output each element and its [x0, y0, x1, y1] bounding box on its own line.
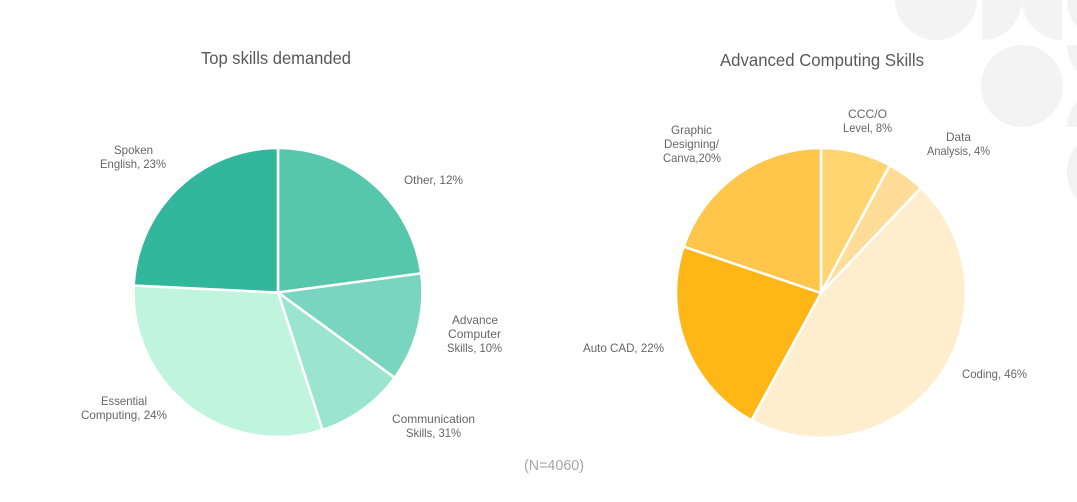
slice: essential computing — [134, 286, 322, 437]
slice: communication skills — [278, 292, 395, 430]
sample size note: (N=4060) — [524, 458, 584, 474]
label: essential computing — [81, 394, 167, 422]
label: graphic designing canva: Graphic — [671, 123, 712, 137]
label: ccc/o level: CCC/O — [848, 107, 887, 121]
title: advanced computing skills: Advanced Computing Skills — [720, 50, 924, 70]
slice: coding — [752, 188, 966, 438]
label: communication skills: Skills, 31% — [406, 426, 461, 440]
label: auto cad: Auto CAD, 22% — [583, 341, 664, 355]
label: graphic designing canva — [663, 123, 721, 165]
label: coding: Coding, 46% — [962, 367, 1027, 381]
label: graphic designing canva: Designing/ — [664, 137, 720, 151]
label: essential computing: Computing, 24% — [81, 408, 167, 422]
label: graphic designing canva: Canva,20% — [663, 151, 721, 165]
label: advance computer skills: Advance — [452, 313, 498, 327]
pie chart: advanced computing skills — [676, 148, 966, 438]
slice: other — [278, 148, 421, 292]
slice: ccc/o level — [821, 148, 890, 293]
label: spoken english: English, 23% — [100, 157, 166, 171]
slice: spoken english — [134, 148, 278, 292]
label: ccc/o level: Level, 8% — [843, 121, 892, 135]
label: essential computing: Essential — [101, 394, 147, 408]
slice: auto cad — [676, 247, 821, 420]
pie chart: top skills demanded — [134, 148, 422, 437]
label: communication skills: Communication — [392, 412, 475, 426]
title: top skills demanded: Top skills demanded — [201, 48, 351, 68]
slice: graphic designing — [684, 148, 821, 293]
label: advance computer skills — [447, 313, 502, 355]
label: other: Other, 12% — [404, 173, 463, 187]
label: advance computer skills: Skills, 10% — [447, 341, 502, 355]
label: spoken english — [100, 143, 166, 171]
label: data analysis: Data — [946, 130, 971, 144]
label: advance computer skills: Computer — [448, 327, 501, 341]
label: communication skills — [392, 412, 475, 440]
label: ccc/o level — [843, 107, 892, 135]
label: data analysis — [927, 130, 990, 158]
slice: advance computer skills — [278, 273, 422, 378]
label: spoken english: Spoken — [114, 143, 153, 157]
slice: data analysis — [821, 165, 921, 293]
label: data analysis: Analysis, 4% — [927, 144, 990, 158]
